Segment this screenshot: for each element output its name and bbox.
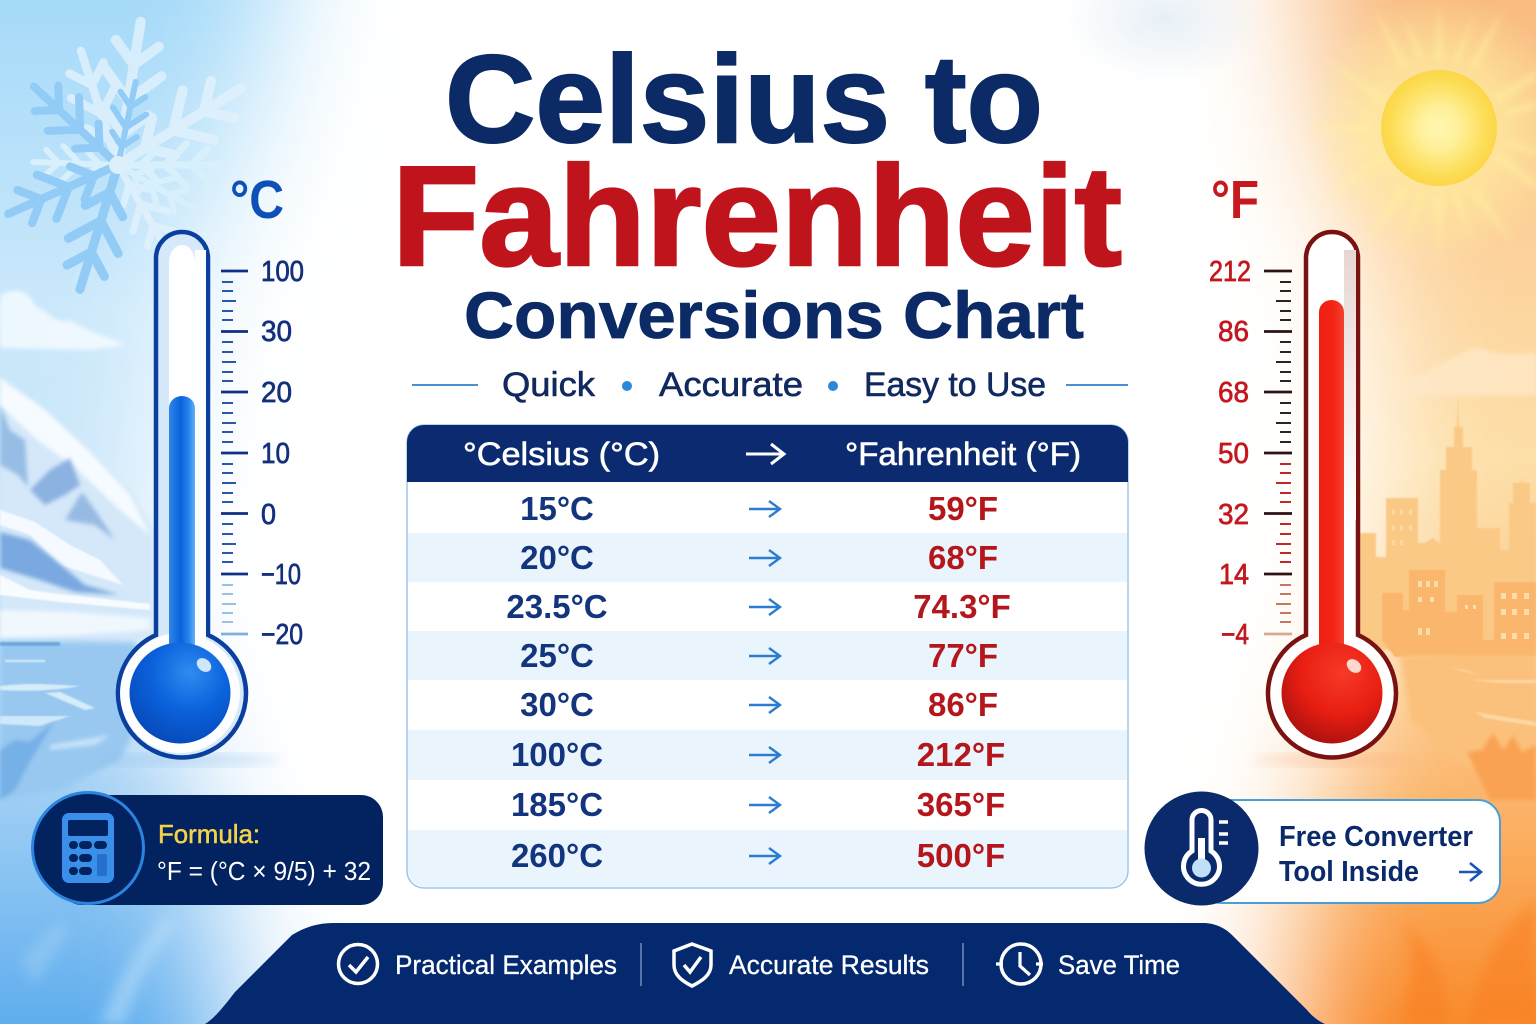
snow on ridge — [0, 378, 150, 535]
formula callout: °F = (°C × 9/5) + 32 — [157, 856, 371, 886]
fahrenheit values: 68°F — [928, 539, 998, 576]
celsius values — [506, 490, 608, 874]
scenery: city skyline and plants — [1360, 347, 1536, 1024]
fahrenheit scale labels: 14 — [1219, 559, 1249, 591]
icy water — [0, 642, 150, 800]
footer banner — [205, 923, 1325, 1024]
table header: °Fahrenheit (°F) — [845, 436, 1081, 472]
celsius values: 260°C — [511, 837, 603, 874]
fahrenheit scale labels: −4 — [1221, 619, 1249, 651]
fahrenheit scale labels: 32 — [1218, 499, 1249, 531]
fahrenheit scale labels: 50 — [1218, 438, 1249, 470]
fahrenheit values: 74.3°F — [913, 588, 1011, 625]
free converter callout: Tool Inside — [1279, 856, 1419, 888]
celsius values: 23.5°C — [506, 588, 608, 625]
fahrenheit unit label: °F — [1211, 170, 1259, 230]
icon: calculator — [62, 813, 114, 883]
tagline: Quick — [502, 366, 596, 404]
feature: practical examples: Practical Examples — [395, 950, 617, 980]
fahrenheit values: 500°F — [917, 837, 1005, 874]
icon: sun — [1300, 0, 1536, 265]
feature: practical examples — [338, 944, 617, 984]
silhouette of plants — [1467, 733, 1536, 800]
title — [392, 31, 1122, 352]
formula callout — [32, 792, 383, 905]
title: Celsius to — [445, 31, 1043, 169]
fahrenheit values: 86°F — [928, 686, 998, 723]
city front layer — [1382, 570, 1536, 657]
top right blue haze — [1070, 0, 1260, 120]
celsius values: 20°C — [520, 539, 594, 576]
celsius values: 30°C — [520, 686, 594, 723]
fahrenheit values: 59°F — [928, 490, 998, 527]
celsius values: 100°C — [511, 736, 603, 773]
celsius values: 25°C — [520, 637, 594, 674]
ice streaks — [100, 915, 178, 1024]
title: Conversions Chart — [464, 278, 1084, 352]
fahrenheit scale labels: 212 — [1209, 256, 1251, 288]
table header — [407, 425, 1128, 482]
table header: °Celsius (°C) — [463, 436, 660, 472]
fahrenheit scale labels: 86 — [1218, 316, 1249, 348]
feature: save time: Save Time — [1058, 950, 1180, 980]
celsius scale labels: −10 — [261, 559, 301, 591]
panel: conversion table — [407, 425, 1128, 888]
feature: save time — [996, 944, 1180, 984]
arrow — [1459, 863, 1481, 881]
celsius unit label: °C — [230, 170, 284, 230]
tagline: Easy to Use — [864, 366, 1046, 404]
sun rays — [1300, 5, 1536, 265]
scenery: clouds and mountains — [0, 291, 178, 1024]
title: Fahrenheit — [392, 137, 1122, 296]
celsius scale labels: 0 — [261, 499, 276, 531]
celsius values: 15°C — [520, 490, 594, 527]
free converter callout — [1144, 792, 1500, 906]
city far layer — [1360, 393, 1536, 650]
celsius scale labels: 10 — [261, 438, 290, 470]
fahrenheit thermometer — [1209, 232, 1412, 765]
fahrenheit values: 365°F — [917, 786, 1005, 823]
front flake — [0, 70, 152, 297]
celsius scale labels — [261, 256, 304, 651]
shore and water — [1400, 655, 1536, 770]
fahrenheit values: 77°F — [928, 637, 998, 674]
lower ridge — [0, 510, 123, 585]
tagline — [412, 366, 1128, 404]
red mercury column — [1319, 300, 1344, 660]
celsius scale labels: 30 — [261, 316, 292, 348]
free converter callout: Free Converter — [1279, 821, 1473, 853]
icon: snowflake — [0, 17, 256, 297]
city windows — [1392, 510, 1412, 545]
fahrenheit values — [913, 490, 1011, 874]
warm side wash — [1207, 0, 1536, 1024]
fahrenheit scale labels: 68 — [1218, 377, 1249, 409]
tagline: Accurate — [659, 366, 803, 404]
table row arrows — [749, 501, 780, 864]
blue bulb — [130, 642, 230, 744]
icon: thermometer — [1184, 810, 1228, 884]
celsius thermometer — [100, 232, 304, 765]
feature: accurate results — [674, 944, 929, 986]
fahrenheit values: 212°F — [917, 736, 1005, 773]
scale ticks — [1264, 271, 1292, 574]
far ridge — [0, 378, 153, 640]
celsius values: 185°C — [511, 786, 603, 823]
celsius scale labels: 100 — [261, 256, 304, 288]
fahrenheit scale labels — [1209, 256, 1251, 651]
red bulb — [1282, 642, 1382, 744]
rock faces — [0, 405, 28, 487]
celsius scale labels: 20 — [261, 377, 292, 409]
celsius scale labels: −20 — [261, 619, 303, 651]
cold side wash — [0, 0, 352, 1024]
blue mercury column — [169, 396, 195, 660]
striped rows — [408, 533, 1127, 780]
scale ticks — [221, 271, 248, 574]
formula callout: Formula: — [158, 819, 260, 849]
back flake — [58, 17, 256, 262]
feature: accurate results: Accurate Results — [729, 950, 929, 980]
